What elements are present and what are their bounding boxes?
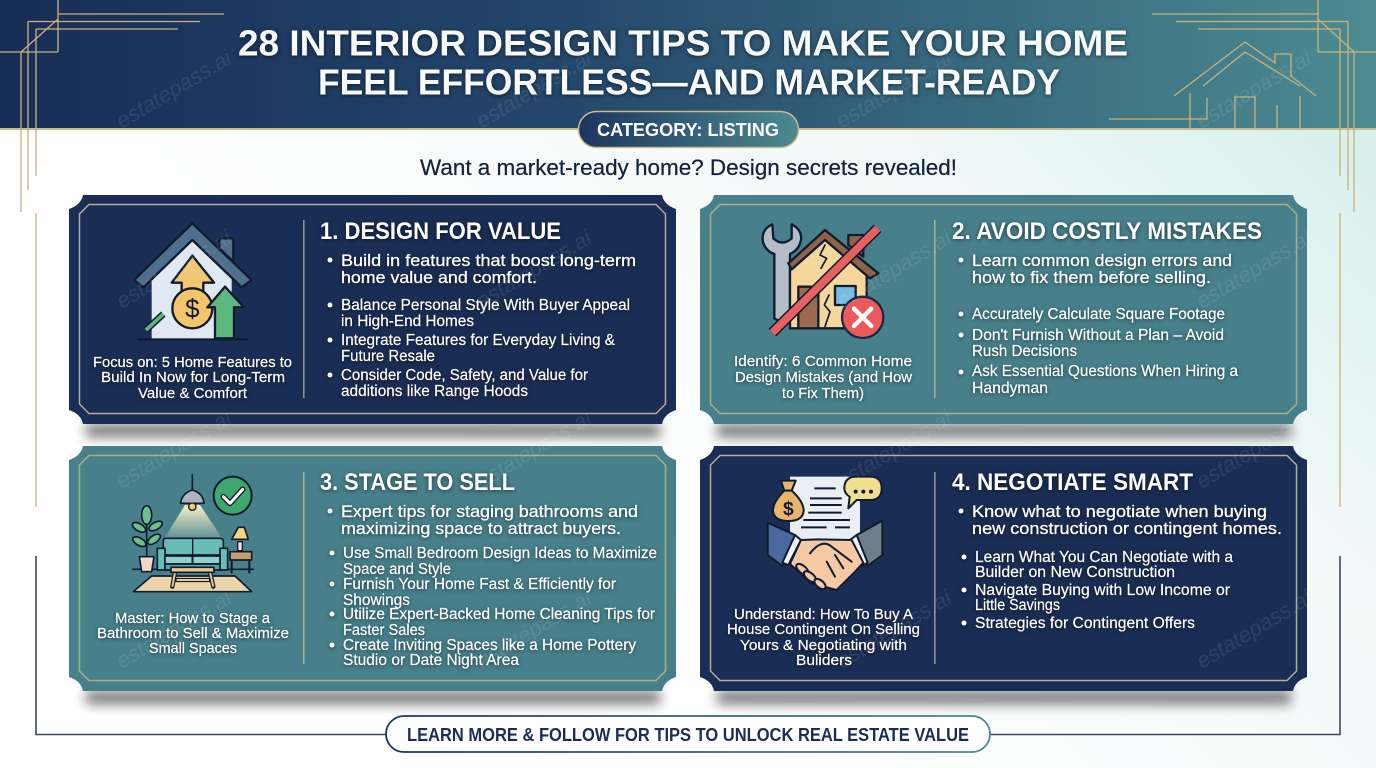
bullet list: Accurately Calculate Square Footage <box>972 306 1225 323</box>
bullet list: Space and Style <box>343 561 451 578</box>
watermark over panels: estatepass.ai <box>112 585 237 673</box>
watermark over panels: estatepass.ai <box>1192 225 1317 313</box>
watermark over panels <box>112 225 1317 673</box>
bullet list: Utilize Expert-Backed Home Cleaning Tips for <box>343 606 655 623</box>
bullet list <box>328 251 636 400</box>
caption: Master: How to Stage a <box>115 610 271 627</box>
icon: contract handshake <box>768 477 882 591</box>
caption: Value & Comfort <box>138 385 248 402</box>
header band <box>0 0 1376 130</box>
icon: contract handshake: $ <box>783 499 794 520</box>
panel: 4 negotiate smart <box>700 446 1307 704</box>
caption: Focus on: 5 Home Features to <box>93 354 292 371</box>
bullet list: Navigate Buying with Low Income or <box>975 582 1230 599</box>
caption: Bathroom to Sell & Maximize <box>97 625 289 642</box>
caption: to Fix Them) <box>782 385 864 402</box>
icon: house value <box>134 223 252 339</box>
bullet list: Rush Decisions <box>972 343 1077 360</box>
bullet list: Know what to negotiate when buying <box>972 502 1267 521</box>
caption: Understand: How To Buy A <box>734 606 913 623</box>
category pill <box>578 112 798 148</box>
gold corner lines: left <box>0 0 224 507</box>
caption: Design Mistakes (and How <box>735 369 912 386</box>
bullet list: Build in features that boost long-term <box>341 251 636 270</box>
watermark over panels: estatepass.ai <box>832 405 957 493</box>
watermark: estatepass.ai <box>1192 45 1317 133</box>
bullet list: Learn What You Can Negotiate with a <box>975 549 1233 566</box>
bullet list: Learn common design errors and <box>972 251 1232 270</box>
caption: Build In Now for Long-Term <box>101 369 285 386</box>
bullet list: Future Resale <box>341 348 435 365</box>
bullet list: Strategies for Contingent Offers <box>975 615 1195 632</box>
bullet list <box>958 502 1282 632</box>
bullet list: Don't Furnish Without a Plan – Avoid <box>972 327 1224 344</box>
watermark over panels: estatepass.ai <box>472 225 597 313</box>
bullet list: Faster Sales <box>343 622 425 639</box>
bottom frame line <box>36 556 1340 734</box>
heading: 3. STAGE TO SELL <box>320 469 515 496</box>
bullet list: additions like Range Hoods <box>341 383 528 400</box>
bullet list: Furnish Your Home Fast & Efficiently for <box>343 576 616 593</box>
watermark: estatepass.ai <box>832 45 957 133</box>
watermark over panels: estatepass.ai <box>832 225 957 313</box>
caption: Small Spaces <box>149 640 237 657</box>
bullet list: how to fix them before selling. <box>972 268 1211 287</box>
footer call to action <box>386 716 990 752</box>
panel: 2 avoid costly mistakes <box>700 195 1307 437</box>
heading: 1. DESIGN FOR VALUE <box>320 218 561 245</box>
caption: Buliders <box>796 652 852 669</box>
caption: House Contingent On Selling <box>727 621 920 638</box>
title: 28 INTERIOR DESIGN TIPS TO MAKE YOUR HOME <box>238 22 1128 64</box>
bullet list: Little Savings <box>975 597 1060 614</box>
title: FEEL EFFORTLESS—AND MARKET-READY <box>318 62 1060 102</box>
watermark: estatepass.ai <box>112 45 237 133</box>
gold corner lines: right <box>1152 0 1376 507</box>
icon: staged living room <box>131 475 253 592</box>
bullet list: Integrate Features for Everyday Living & <box>341 332 616 349</box>
caption <box>734 353 912 402</box>
title <box>238 22 1128 102</box>
house outline decoration <box>1109 42 1316 129</box>
watermark over panels: estatepass.ai <box>112 405 237 493</box>
bullet list: Handyman <box>972 380 1048 397</box>
bullet list: home value and comfort. <box>341 268 537 287</box>
icon: broken house and wrench <box>763 224 883 338</box>
heading: 2. AVOID COSTLY MISTAKES <box>952 218 1262 245</box>
bullet list: Consider Code, Safety, and Value for <box>341 367 588 384</box>
bullet list: Balance Personal Style With Buyer Appeal <box>341 297 630 314</box>
watermark <box>112 45 1317 133</box>
watermark over panels: estatepass.ai <box>1192 405 1317 493</box>
caption <box>727 606 920 669</box>
caption <box>93 354 292 402</box>
bullet list: maximizing space to attract buyers. <box>341 519 621 538</box>
panel: 1 design for value <box>69 195 676 437</box>
bullet list <box>328 502 657 669</box>
watermark over panels: estatepass.ai <box>472 405 597 493</box>
bullet list: Showings <box>343 592 410 609</box>
watermark over panels: estatepass.ai <box>472 585 597 673</box>
watermark: estatepass.ai <box>472 45 597 133</box>
bullet list: in High-End Homes <box>341 313 474 330</box>
watermark over panels: estatepass.ai <box>112 225 237 313</box>
icon: house value: $ <box>185 294 200 324</box>
panel: 3 stage to sell <box>69 446 676 704</box>
bullet list: Ask Essential Questions When Hiring a <box>972 363 1238 380</box>
heading: 4. NEGOTIATE SMART <box>952 469 1193 496</box>
bullet list: Expert tips for staging bathrooms and <box>341 502 638 521</box>
bullet list: Builder on New Construction <box>975 564 1175 581</box>
watermark over panels: estatepass.ai <box>1192 585 1317 673</box>
bullet list: Studio or Date Night Area <box>343 652 519 669</box>
watermark over panels: estatepass.ai <box>832 585 957 673</box>
subtitle: Want a market-ready home? Design secrets revealed! <box>420 155 957 180</box>
bullet list <box>958 251 1238 397</box>
caption: Identify: 6 Common Home <box>734 353 912 370</box>
bullet list: Use Small Bedroom Design Ideas to Maximize <box>343 545 657 562</box>
category pill: CATEGORY: LISTING <box>597 120 779 140</box>
bullet list: new construction or contingent homes. <box>972 519 1282 538</box>
footer call to action: LEARN MORE & FOLLOW FOR TIPS TO UNLOCK REAL ESTATE VALUE <box>407 725 969 745</box>
bullet list: Create Inviting Spaces like a Home Pottery <box>343 637 636 654</box>
caption: Yours & Negotiating with <box>740 637 907 654</box>
caption <box>97 610 289 657</box>
